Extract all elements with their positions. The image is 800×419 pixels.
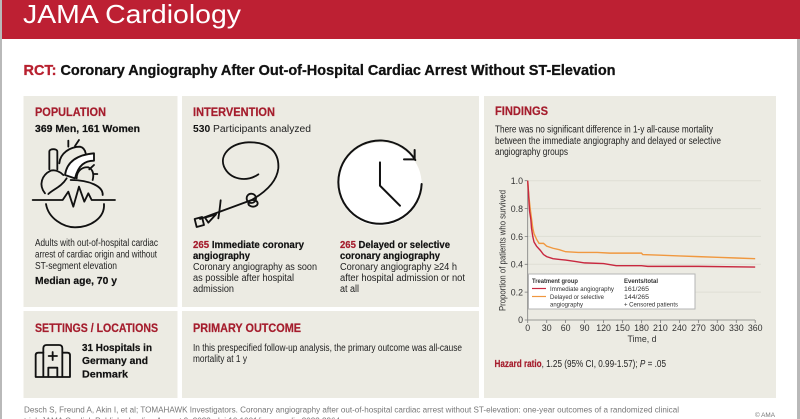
hospital count and countries: 31 Hospitals in — [82, 342, 152, 354]
population description: ST-segment elevation — [35, 261, 117, 272]
x-axis tick labels: 150 — [615, 323, 630, 333]
x-axis tick labels: 240 — [672, 323, 687, 333]
arm: immediate angiography: 265 Immediate coronary — [193, 239, 304, 251]
arm: delayed or selective angiography: Coronary angiography ≥24 h — [340, 262, 457, 273]
y-axis title: Proportion of patients who survived — [498, 190, 508, 311]
primary outcome text: In this prespecified follow-up analysis, the primary outcome was all-cause — [193, 343, 462, 354]
hospital count and countries: Denmark — [82, 368, 128, 380]
y-axis tick labels: 0.6 — [511, 232, 523, 242]
x-axis tick labels: 30 — [542, 323, 552, 333]
survival chart — [498, 176, 763, 344]
primary outcome text — [193, 343, 462, 365]
median age: Median age, 70 y — [35, 275, 117, 287]
arm: immediate angiography: angiography — [193, 250, 250, 262]
x-axis tick labels: 60 — [561, 323, 571, 333]
icon: clock — [338, 140, 422, 226]
panel: intervention — [182, 96, 479, 307]
x-axis title: Time, d — [627, 334, 657, 344]
panel: findings — [484, 96, 776, 398]
arm: delayed or selective angiography: after hospital admission or not — [340, 273, 465, 284]
findings text: There was no significant difference in 1-y all-cause mortality — [495, 125, 713, 136]
chart legend: 161/265 — [624, 286, 649, 293]
participants analyzed: 530 Participants analyzed — [193, 124, 311, 135]
x-axis tick labels: 0 — [525, 323, 530, 333]
arm: immediate angiography: admission — [193, 284, 234, 295]
chart legend: Delayed or selective — [550, 294, 604, 301]
curve: delayed or selective angiography — [528, 181, 755, 259]
heading: settings and locations: SETTINGS / LOCATIONS — [35, 323, 158, 335]
population description: arrest of cardiac origin and without — [35, 250, 157, 260]
heading: intervention: INTERVENTION — [193, 107, 275, 119]
citation — [24, 405, 679, 419]
panel: population — [24, 96, 178, 307]
primary outcome text: mortality at 1 y — [193, 354, 247, 365]
chart legend — [528, 274, 695, 309]
x-axis tick labels: 270 — [691, 323, 706, 333]
participants by sex: 369 Men, 161 Women — [35, 123, 140, 135]
y-axis tick labels: 0.8 — [511, 204, 523, 214]
hazard ratio: Hazard ratio, 1.25 (95% CI, 0.99-1.57); P = .05 — [494, 359, 666, 370]
y-axis tick labels: 0.4 — [511, 260, 523, 270]
title: RCT: Coronary Angiography After Out-of-Hospital Cardiac Arrest Without ST-Elevation — [24, 63, 616, 79]
header banner — [2, 0, 800, 39]
population description: Adults with out-of-hospital cardiac — [35, 238, 158, 249]
chart legend: Events/total — [624, 278, 658, 285]
chart legend: + Censored patients — [624, 302, 679, 308]
arm: immediate angiography — [193, 239, 317, 295]
x-axis tick labels: 120 — [596, 323, 611, 333]
arm: immediate angiography: Coronary angiography as soon — [193, 262, 317, 273]
panel: settings and locations — [24, 311, 178, 398]
hospital count and countries — [82, 342, 152, 380]
y-axis tick labels: 1.0 — [511, 176, 523, 186]
x-axis tick labels: 210 — [653, 323, 668, 333]
arm: delayed or selective angiography: 265 Delayed or selective — [340, 239, 450, 251]
y-axis tick labels: 0 — [518, 315, 523, 325]
heading: findings: FINDINGS — [495, 106, 548, 118]
hospital count and countries: Germany and — [82, 355, 148, 367]
chart legend: angiography — [550, 302, 584, 308]
heading: population: POPULATION — [35, 107, 106, 119]
icon: catheter — [195, 142, 278, 227]
curve: immediate angiography — [528, 181, 755, 267]
findings text — [495, 125, 721, 158]
x-axis tick labels: 360 — [748, 323, 763, 333]
heading: primary outcome: PRIMARY OUTCOME — [193, 323, 301, 335]
findings text: between the immediate angiography and delayed or selective — [495, 136, 721, 147]
y-axis tick labels — [511, 176, 523, 325]
population description — [35, 238, 158, 272]
citation: Desch S, Freund A, Akin I, et al; TOMAHAWK Investigators. Coronary angiography after out-of-hospital cardiac arrest without ST-elevation: one-year outcomes of a randomized clinical — [24, 405, 679, 415]
panel: primary outcome — [182, 311, 479, 398]
findings text: angiography groups — [495, 147, 568, 158]
x-axis tick labels: 330 — [729, 323, 744, 333]
x-axis tick labels — [525, 323, 763, 333]
arm: delayed or selective angiography: coronary angiography — [340, 250, 440, 262]
x-axis tick labels: 300 — [710, 323, 725, 333]
icon: hospital — [36, 345, 70, 377]
x-axis tick labels: 180 — [634, 323, 649, 333]
x-axis tick labels: 90 — [580, 323, 590, 333]
arm: delayed or selective angiography — [340, 239, 465, 295]
chart legend: Treatment group — [532, 278, 578, 285]
chart legend: Immediate angiography — [550, 286, 615, 293]
arm: immediate angiography: as possible after hospital — [193, 273, 294, 284]
arm: delayed or selective angiography: at all — [340, 284, 359, 295]
y-axis tick labels: 0.2 — [511, 288, 523, 298]
icon: heart with ECG — [33, 140, 115, 227]
chart legend: 144/265 — [624, 294, 649, 301]
copyright: © AMA — [755, 411, 776, 419]
